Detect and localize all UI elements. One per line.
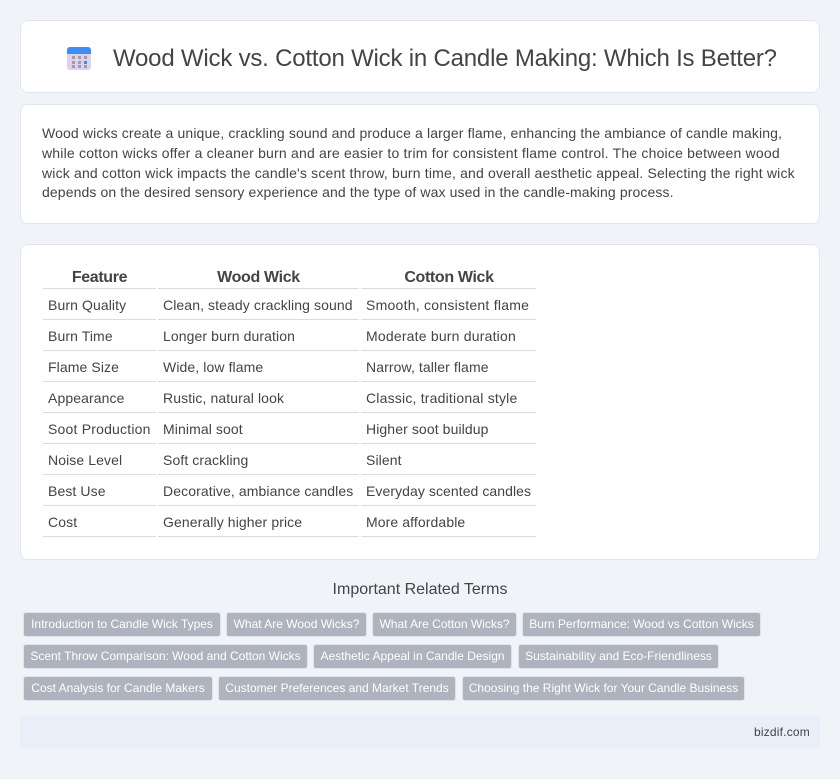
comparison table: Appearance (48, 390, 125, 406)
comparison table: Classic, traditional style (366, 390, 517, 406)
comparison table: Minimal soot (163, 421, 243, 437)
related term tags: Sustainability and Eco-Friendliness (525, 649, 712, 663)
intro panel (20, 104, 820, 224)
table panel (20, 244, 820, 560)
comparison table: Everyday scented candles (366, 483, 531, 499)
comparison table: Burn Time (48, 328, 113, 344)
comparison table: Soot Production (48, 421, 151, 437)
comparison table: Wood Wick (217, 269, 300, 286)
related term tags: Introduction to Candle Wick Types (31, 617, 213, 631)
icon: calendar (67, 47, 91, 70)
comparison table: More affordable (366, 514, 465, 530)
related term tags: Choosing the Right Wick for Your Candle Business (469, 681, 738, 695)
related term tags: What Are Wood Wicks? (234, 617, 359, 631)
comparison table: Cotton Wick (404, 269, 494, 286)
intro text: Wood wicks create a unique, crackling sound and produce a larger flame, enhancing the ambiance of candle making, (42, 125, 782, 141)
comparison table: Longer burn duration (163, 328, 295, 344)
comparison table: Burn Quality (48, 297, 126, 313)
comparison table: Higher soot buildup (366, 421, 489, 437)
related terms heading: Important Related Terms (333, 581, 507, 598)
comparison table: Smooth, consistent flame (366, 297, 529, 313)
footer brand: bizdif.com (754, 725, 810, 739)
comparison table: Noise Level (48, 452, 122, 468)
related term tags (23, 612, 761, 701)
comparison table: Generally higher price (163, 514, 302, 530)
comparison table: Rustic, natural look (163, 390, 284, 406)
comparison table: Soft crackling (163, 452, 248, 468)
related term tags: Customer Preferences and Market Trends (225, 681, 449, 695)
comparison table: Flame Size (48, 359, 119, 375)
related term tags: What Are Cotton Wicks? (379, 617, 510, 631)
comparison table: Clean, steady crackling sound (163, 297, 353, 313)
title: Wood Wick vs. Cotton Wick in Candle Making: Which Is Better? (113, 45, 777, 72)
intro text: while cotton wicks offer a cleaner burn and are easier to trim for consistent flame control. The choice between wood (42, 145, 780, 161)
intro text: wick and cotton wick impacts the candle's scent throw, burn time, and overall aesthetic appeal. Selecting the right wick (42, 165, 795, 181)
comparison table: Wide, low flame (163, 359, 263, 375)
intro text (42, 125, 795, 200)
comparison table: Best Use (48, 483, 106, 499)
related term tags: Aesthetic Appeal in Candle Design (320, 649, 505, 663)
related term tags: Burn Performance: Wood vs Cotton Wicks (529, 617, 754, 631)
comparison table: Moderate burn duration (366, 328, 516, 344)
comparison table: Narrow, taller flame (366, 359, 489, 375)
comparison table (43, 269, 536, 537)
footer bar (20, 715, 820, 749)
header: feature: Feature (72, 269, 127, 286)
related term tags: Cost Analysis for Candle Makers (31, 681, 205, 695)
comparison table: Cost (48, 514, 77, 530)
related term tags: Scent Throw Comparison: Wood and Cotton Wicks (30, 649, 301, 663)
comparison table: Silent (366, 452, 402, 468)
title panel (20, 20, 820, 93)
intro text: depends on the desired sensory experience and the type of wax used in the candle-making process. (42, 184, 674, 200)
comparison table: Decorative, ambiance candles (163, 483, 353, 499)
